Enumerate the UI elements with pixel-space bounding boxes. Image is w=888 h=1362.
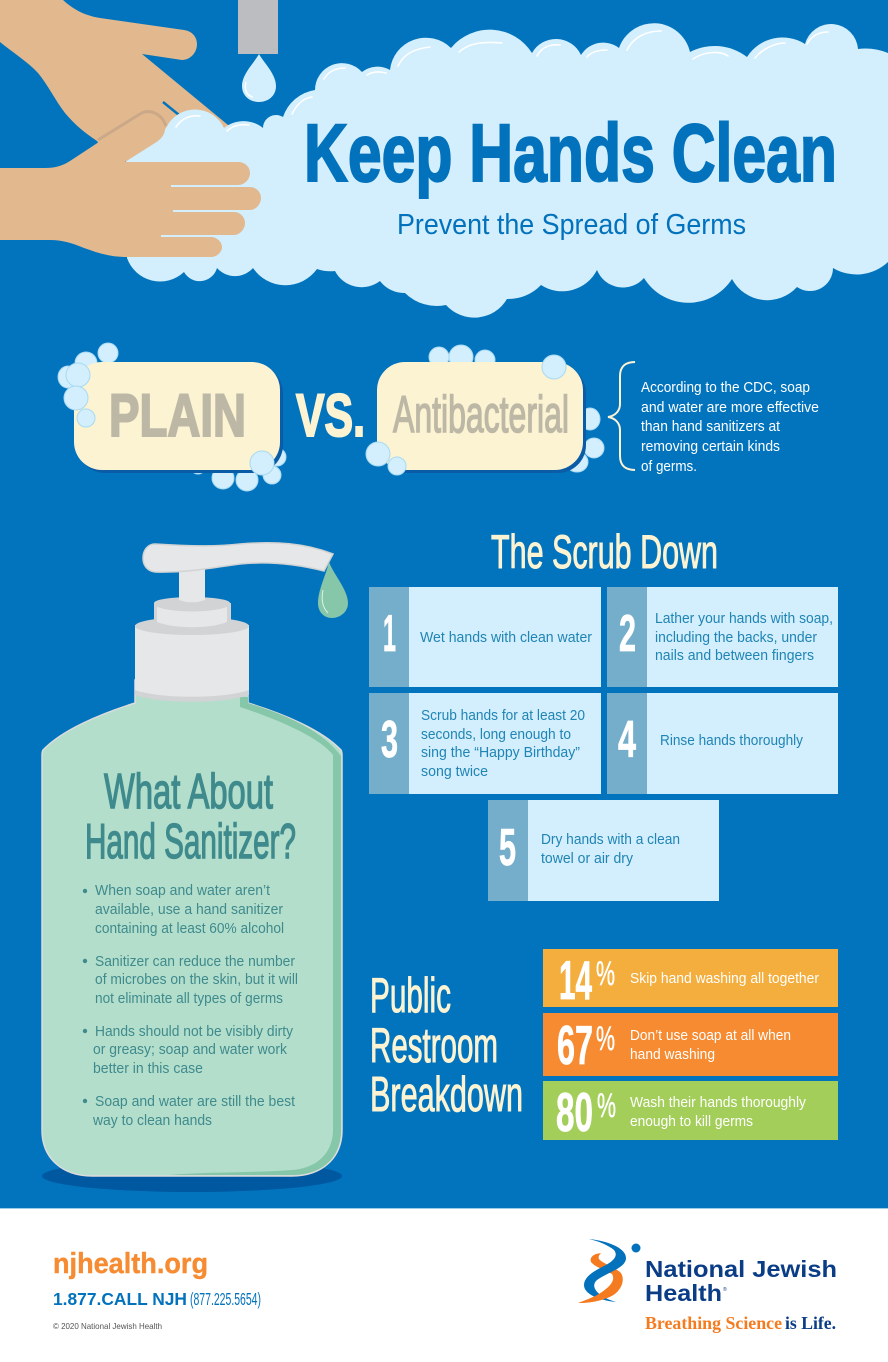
heading: public restroom breakdown: Restroom [370,1019,498,1073]
phone number: (877.225.5654) [190,1289,261,1309]
step 2: including the backs, under [655,630,817,646]
bullet list: way to clean hands [92,1113,212,1129]
stat: 80 percent: % [597,1087,616,1125]
bottle shadow [42,1160,342,1192]
bullet list: or greasy; soap and water work [93,1042,288,1058]
icon: pump nozzle [143,543,333,572]
text block: CDC note [641,380,819,475]
subtitle: Prevent the Spread of Germs [397,209,746,241]
step 5: Dry hands with a clean [541,832,680,848]
icon: bottle cap [135,617,249,702]
versus label: VS. [296,382,365,449]
icon: faucet [238,0,278,54]
step 1: 1 [383,605,396,663]
icon: soap drip [318,562,348,618]
text block: CDC note: According to the CDC, soap [641,380,810,396]
step 3: 3 [381,711,398,769]
stat: 67 percent: 67 [557,1014,593,1076]
stat: 14 percent: % [596,955,615,993]
bullet list: Soap and water are still the best [95,1094,295,1110]
phone number [53,1289,261,1309]
heading: public restroom breakdown [370,969,523,1122]
stat: 67 percent: Don’t use soap at all when [630,1028,791,1044]
heading: what about hand sanitizer [85,765,296,869]
bullet list: available, use a hand sanitizer [95,902,283,918]
stat: 67 percent: hand washing [630,1047,715,1063]
stat: 14 percent [543,949,838,1011]
stat: 80 percent: 80 [556,1081,593,1143]
bullet list [83,883,298,1129]
phone number: 1.877.CALL NJH [53,1289,187,1309]
text block: CDC note: than hand sanitizers at [641,419,780,435]
bullet list: containing at least 60% alcohol [95,921,284,937]
step 5: towel or air dry [541,851,634,867]
stat: 67 percent: % [596,1020,615,1058]
step 1: Wet hands with clean water [420,630,592,646]
bottle body [42,680,342,1176]
step 4 [607,693,838,794]
heading: public restroom breakdown: Public [370,969,451,1023]
icon: water drop [242,54,276,102]
step 3: song twice [421,764,488,780]
bullet list: Hands should not be visibly dirty [95,1024,294,1040]
stat: 67 percent [543,1013,838,1076]
icon: pump collar [154,597,231,629]
logo: national jewish health: is Life. [785,1313,836,1333]
heading: public restroom breakdown: Breakdown [370,1068,523,1122]
stat: 80 percent: Wash their hands thoroughly [630,1095,807,1111]
heading: the scrub down: The Scrub Down [491,525,718,578]
step 3: seconds, long enough to [421,727,571,743]
step 4: Rinse hands thoroughly [660,733,804,749]
heading: what about hand sanitizer: Hand Sanitizer? [85,815,296,869]
soap bar: plain: PLAIN [109,382,246,449]
footer panel [0,1208,888,1362]
header illustration: hands, faucet and lather [0,0,888,318]
icon: upper hand [0,0,235,160]
stat: 80 percent [543,1081,838,1143]
logo: national jewish health: Breathing Science [645,1313,782,1333]
bracket [608,362,635,470]
bullet list: Sanitizer can reduce the number [95,954,295,970]
logo: national jewish health: Health [645,1280,722,1306]
bullet list: not eliminate all types of germs [95,991,283,1007]
soap bar: antibacterial [366,345,604,475]
soap bar: plain [58,343,286,491]
step 2: 2 [619,605,636,663]
step 5: 5 [499,819,516,877]
text block: CDC note: and water are more effective [641,400,819,416]
stat: 14 percent: 14 [559,949,592,1011]
icon: pump stem [179,568,205,602]
logo: national jewish health: ® [723,1286,727,1293]
step 2: nails and between fingers [655,648,814,664]
step 2 [607,587,838,687]
heading: what about hand sanitizer: What About [104,765,273,819]
bullet list: of microbes on the skin, but it will [95,972,298,988]
step 4: 4 [618,711,636,769]
bullet list: When soap and water aren’t [95,883,270,899]
copyright: © 2020 National Jewish Health [53,1321,162,1331]
text block: CDC note: removing certain kinds [641,439,780,455]
soap bar: antibacterial: Antibacterial [393,386,569,444]
step 2: Lather your hands with soap, [655,611,833,627]
text block: CDC note: of germs. [641,459,697,475]
step 3: sing the “Happy Birthday” [421,745,580,761]
logo: national jewish health: National Jewish [645,1256,837,1282]
sanitizer bottle [42,543,348,1192]
step 3 [369,693,601,794]
icon: lower hand [0,111,261,257]
soap lather cloud [126,23,888,318]
bullet list: better in this case [93,1061,203,1077]
stat: 14 percent: Skip hand washing all together [630,971,819,987]
website: njhealth.org [53,1248,208,1280]
step 5 [488,800,719,901]
step 1 [369,587,601,687]
step 3: Scrub hands for at least 20 [421,708,585,724]
logo: national jewish health [578,1239,837,1333]
stat: 80 percent: enough to kill germs [630,1114,753,1130]
